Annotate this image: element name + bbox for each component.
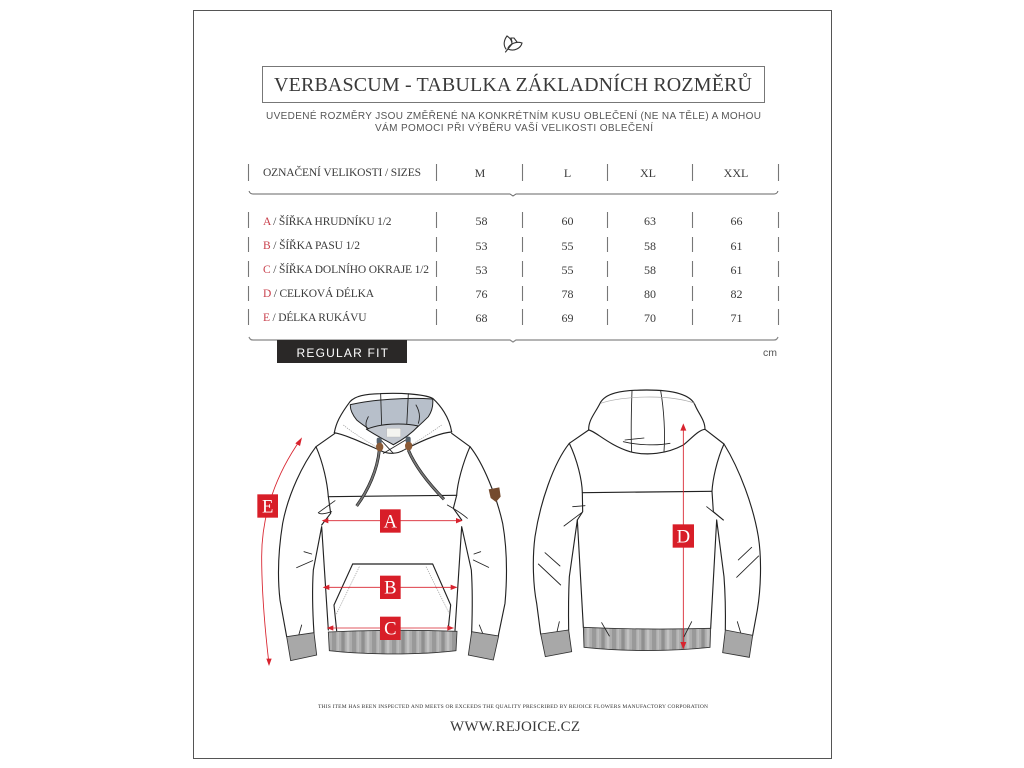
row B <box>248 237 778 253</box>
fit badge <box>277 340 407 363</box>
dimension D <box>673 423 694 649</box>
dimension B: B <box>384 578 397 599</box>
row B: B / ŠÍŘKA PASU 1/2 <box>263 238 360 252</box>
title box: VERBASCUM - TABULKA ZÁKLADNÍCH ROZMĚRŮ <box>274 72 753 96</box>
row A: 63 <box>644 214 656 228</box>
row E: E / DÉLKA RUKÁVU <box>263 310 367 324</box>
intro text: UVEDENÉ ROZMĚRY JSOU ZMĚŘENÉ NA KONKRÉTNÍM KUSU OBLEČENÍ (NE NA TĚLE) A MOHOU <box>266 109 761 122</box>
row E: 71 <box>730 311 742 325</box>
back ribbed hem and cuffs <box>541 622 753 657</box>
row D: D / CELKOVÁ DÉLKA <box>263 286 375 300</box>
back hoodie diagram <box>533 390 761 657</box>
table header row: XXL <box>724 166 748 180</box>
row B: 61 <box>730 239 742 253</box>
row A <box>248 212 778 228</box>
dimension E <box>257 437 302 666</box>
quality statement: THIS ITEM HAS BEEN INSPECTED AND MEETS OR EXCEEDS THE QUALITY PRESCRIBED BY REJOICE FLOWERS MANUFACTORY CORPORATION <box>318 704 708 710</box>
row B: 53 <box>476 239 488 253</box>
row D: 76 <box>476 287 488 301</box>
hood <box>334 393 452 453</box>
table header row <box>248 164 778 181</box>
title box <box>262 66 764 102</box>
dimension B <box>323 576 457 599</box>
icon: sleeve patch <box>489 487 501 502</box>
dimension E: E <box>262 496 273 517</box>
pocket <box>334 564 451 631</box>
row A: 66 <box>730 214 742 228</box>
row A: A / ŠÍŘKA HRUDNÍKU 1/2 <box>263 214 392 228</box>
table header row: L <box>564 166 571 180</box>
bottom brace <box>249 337 778 342</box>
row D <box>248 286 778 301</box>
row B: 55 <box>562 239 574 253</box>
table header row: OZNAČENÍ VELIKOSTI / SIZES <box>263 165 421 179</box>
row E: 69 <box>562 311 574 325</box>
dimension A <box>322 509 463 533</box>
row C: 53 <box>476 263 488 277</box>
row D: 82 <box>730 287 742 301</box>
dimension C: C <box>384 619 397 640</box>
row B: 58 <box>644 239 656 253</box>
row C: 61 <box>730 263 742 277</box>
back hood <box>589 390 705 454</box>
front hoodie diagram <box>257 393 507 666</box>
back body outline <box>533 429 761 636</box>
row E: 68 <box>476 311 488 325</box>
row D: 78 <box>562 287 574 301</box>
row E <box>248 309 778 325</box>
row A: 58 <box>476 214 488 228</box>
size table <box>248 164 778 342</box>
unit label: cm <box>763 347 777 359</box>
row C <box>248 261 778 277</box>
icon: cord toggles <box>376 437 412 451</box>
hood label <box>387 428 401 437</box>
table header row: XL <box>640 166 656 180</box>
row A: 60 <box>562 214 574 228</box>
top brace <box>249 191 778 196</box>
body outline <box>279 433 507 640</box>
intro text <box>266 109 761 134</box>
ribbed hem and cuffs <box>287 630 499 661</box>
row C: C / ŠÍŘKA DOLNÍHO OKRAJE 1/2 <box>263 262 429 276</box>
row E: 70 <box>644 311 656 325</box>
intro text: VÁM POMOCI PŘI VÝBĚRU VAŠÍ VELIKOSTI OBLEČENÍ <box>375 121 653 134</box>
fit badge: REGULAR FIT <box>296 346 389 360</box>
dimension C <box>327 617 454 640</box>
icon: flower logo <box>504 36 522 52</box>
website: WWW.REJOICE.CZ <box>450 719 580 735</box>
drawstrings <box>357 450 444 506</box>
page frame <box>194 10 832 758</box>
row D: 80 <box>644 287 656 301</box>
row C: 55 <box>562 263 574 277</box>
dimension A: A <box>384 511 398 532</box>
table header row: M <box>475 166 486 180</box>
dimension D: D <box>677 526 690 547</box>
row C: 58 <box>644 263 656 277</box>
